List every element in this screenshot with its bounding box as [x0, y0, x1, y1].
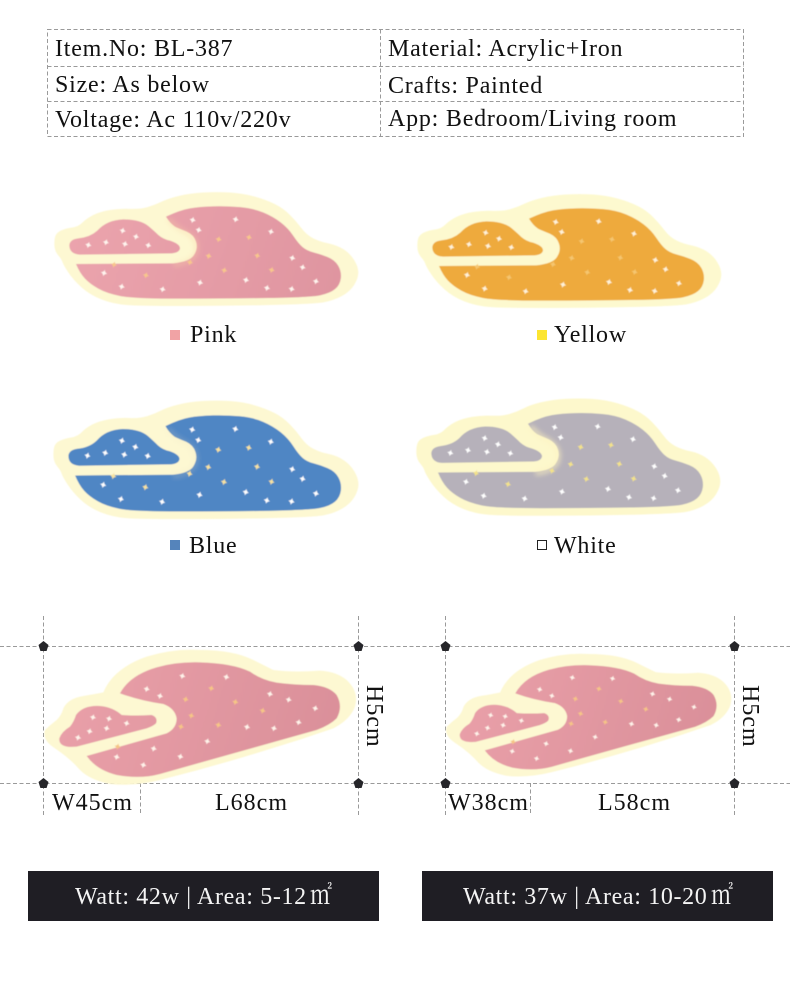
dimension labels: small [448, 685, 763, 816]
lamp: white [416, 398, 720, 516]
lamp: large size [44, 650, 356, 785]
dimension labels: large [52, 685, 387, 816]
lamp: small size [446, 654, 731, 776]
crafts: Crafts: Painted [388, 73, 543, 99]
size: Size: As below [55, 72, 210, 98]
material: Material: Acrylic+Iron [388, 36, 623, 62]
watt bar: large: Watt: 42w | Area: 5-12 [75, 884, 307, 910]
dimension labels: large: H5cm [361, 685, 387, 748]
dimension labels: small: L58cm [598, 790, 671, 816]
watt bar: large: ㎡ [310, 881, 333, 911]
legend: blue: Blue [189, 533, 237, 559]
app: App: Bedroom/Living room [388, 106, 677, 132]
watt bar: large [28, 871, 379, 921]
dimension lines [0, 616, 790, 815]
lamp: blue [53, 401, 358, 519]
lamp: yellow [417, 194, 721, 308]
watt bar: small [422, 871, 773, 921]
watt bar: small: Watt: 37w | Area: 10-20 [463, 884, 707, 910]
legend: yellow: Yellow [554, 322, 627, 348]
item number: Item.No: BL-387 [55, 36, 233, 62]
legend: white: White [554, 533, 617, 559]
voltage: Voltage: Ac 110v/220v [55, 107, 291, 133]
dimension markers [38, 641, 740, 788]
dimension labels: large: W45cm [52, 790, 133, 816]
watt bar: small: ㎡ [711, 881, 734, 911]
legend: pink: Pink [190, 322, 237, 348]
dimension labels: small: W38cm [448, 790, 529, 816]
lamp: pink [54, 192, 358, 306]
dimension labels: small: H5cm [737, 685, 763, 748]
dimension labels: large: L68cm [215, 790, 288, 816]
spec table [48, 30, 744, 136]
